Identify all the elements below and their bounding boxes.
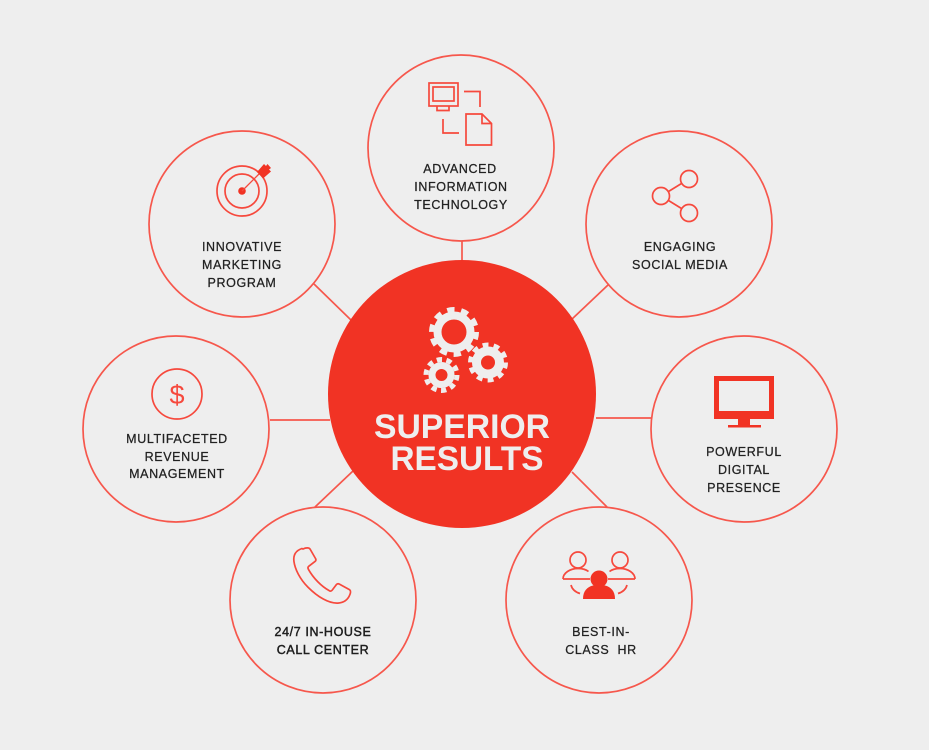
label: DIGITAL bbox=[718, 463, 770, 477]
icon: target with arrow bbox=[217, 164, 271, 216]
label bbox=[632, 240, 728, 272]
label bbox=[275, 625, 371, 657]
label: PRESENCE bbox=[707, 481, 781, 495]
label: PROGRAM bbox=[208, 276, 276, 290]
central hub: superior results: RESULTS bbox=[390, 440, 544, 478]
label: MARKETING bbox=[202, 258, 282, 272]
connector lines bbox=[270, 241, 651, 507]
label: 24/7 IN-HOUSE bbox=[275, 625, 371, 639]
icon: computer and document bbox=[429, 83, 492, 145]
label: MANAGEMENT bbox=[129, 467, 225, 481]
icon: gears bbox=[426, 310, 506, 390]
panel: innovative marketing program bbox=[149, 131, 335, 317]
heading: superior results: SUPERIOR bbox=[374, 408, 550, 446]
label: ADVANCED bbox=[423, 162, 497, 176]
central hub: superior results bbox=[328, 260, 596, 528]
label: CLASS HR bbox=[565, 643, 637, 657]
panel: engaging social media bbox=[586, 131, 772, 317]
panel: advanced information technology bbox=[368, 55, 554, 241]
label: CALL CENTER bbox=[277, 643, 369, 657]
label: ENGAGING bbox=[644, 240, 716, 254]
panel: multifaceted revenue management bbox=[83, 336, 269, 522]
icon: phone handset bbox=[294, 548, 351, 603]
label: INFORMATION bbox=[414, 180, 508, 194]
label bbox=[565, 625, 637, 657]
icon: share nodes bbox=[652, 170, 698, 222]
label: MULTIFACETED bbox=[126, 432, 228, 446]
label: TECHNOLOGY bbox=[414, 198, 508, 212]
icon: dollar coin bbox=[152, 369, 202, 419]
label bbox=[414, 162, 508, 212]
label bbox=[126, 432, 228, 481]
icon: people bbox=[563, 552, 635, 599]
label bbox=[202, 240, 282, 290]
label: INNOVATIVE bbox=[202, 240, 282, 254]
label: SOCIAL MEDIA bbox=[632, 258, 728, 272]
label: BEST-IN- bbox=[572, 625, 630, 639]
panel: 24/7 in-house call center bbox=[230, 507, 416, 693]
panel: powerful digital presence bbox=[651, 336, 837, 522]
label bbox=[706, 445, 782, 495]
label: REVENUE bbox=[145, 450, 209, 464]
label: POWERFUL bbox=[706, 445, 782, 459]
icon: dollar coin: $ bbox=[169, 380, 185, 410]
panel: best-in-class hr bbox=[506, 507, 692, 693]
icon: monitor bbox=[714, 376, 774, 428]
